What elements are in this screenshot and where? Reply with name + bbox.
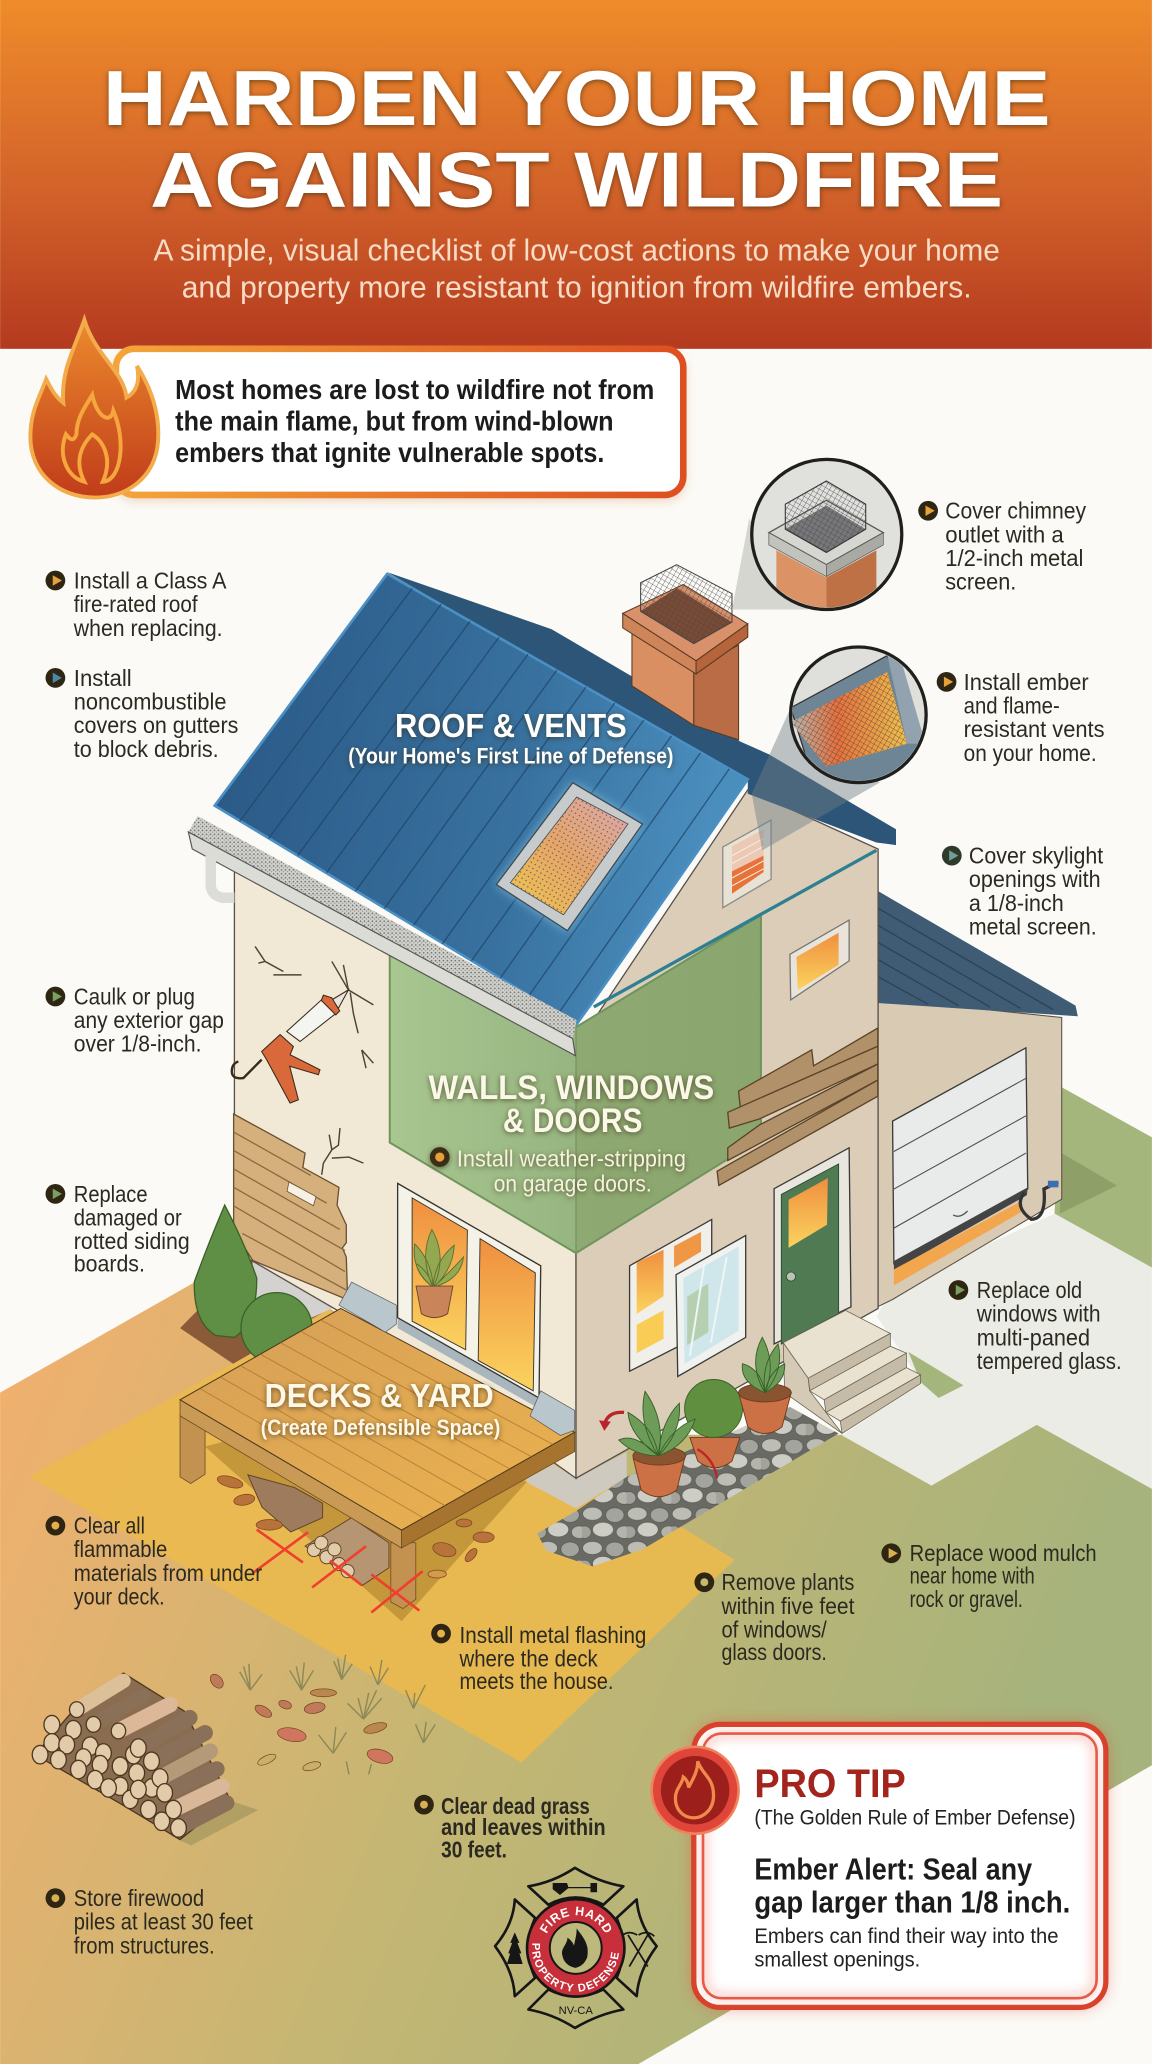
label: metal flashing: where the deck	[459, 1645, 598, 1671]
lawn patch by steps	[908, 1352, 964, 1398]
label: tempered glass: windows with	[976, 1301, 1101, 1327]
pro tip subheading: (The Golden Rule of Ember Defense)	[754, 1804, 1076, 1829]
label: remove plants: Remove plants	[721, 1569, 854, 1595]
label: remove plants: within five feet	[721, 1593, 855, 1619]
fascia	[188, 832, 575, 1056]
label: firewood	[46, 1885, 253, 1958]
lawn shadow	[1060, 1153, 1117, 1214]
label: dead grass: 30 feet.	[441, 1836, 507, 1862]
label: skylight: Cover skylight	[969, 843, 1104, 869]
caulk gun	[232, 990, 348, 1103]
label: tempered glass: Replace old	[977, 1277, 1082, 1303]
pro tip heading: PRO TIP	[754, 1762, 906, 1806]
right wall	[576, 790, 878, 1478]
hose	[1020, 1182, 1058, 1219]
label: firewood: piles at least 30 feet	[74, 1909, 253, 1935]
label: gutter covers: Install	[74, 665, 132, 691]
tree	[507, 1932, 523, 1964]
pro tip message: Ember Alert: Seal any	[754, 1854, 1032, 1887]
label: gutter covers: covers on gutters	[74, 712, 238, 738]
callout text: embers that ignite vulnerable spots.	[175, 437, 604, 468]
section heading: decks and yard	[261, 1377, 500, 1440]
firewood under deck	[248, 1475, 389, 1586]
ground: back lawn	[1054, 1087, 1152, 1268]
label: firewood: from structures.	[74, 1932, 215, 1958]
subtitle: A simple, visual checklist of low-cost actions to make your home	[153, 235, 1000, 268]
subtitle: and property more resistant to ignition from wildfire embers.	[182, 271, 972, 304]
section heading: roof and vents	[348, 707, 673, 768]
label: metal flashing: meets the house.	[460, 1668, 614, 1694]
shrubs	[194, 1205, 312, 1364]
label: dead grass: Clear dead grass	[441, 1793, 590, 1819]
chimney	[623, 565, 748, 740]
label: siding: damaged or	[74, 1204, 182, 1230]
deck top	[180, 1308, 575, 1530]
label: under deck: flammable	[74, 1536, 167, 1562]
dead grass and leaves	[208, 1655, 435, 1774]
icon: pro tip flame	[652, 1747, 739, 1834]
cross lobes	[495, 1868, 657, 2028]
label: gutter covers	[46, 665, 238, 762]
logo badge	[494, 1866, 658, 2030]
gable vent	[723, 820, 771, 908]
front door	[774, 1148, 851, 1344]
indoor plant	[414, 1229, 463, 1318]
pro tip message	[754, 1854, 1070, 1920]
label: mulch: Replace wood mulch	[910, 1540, 1097, 1566]
skylight	[496, 783, 642, 931]
label: tempered glass: multi-paned	[977, 1324, 1090, 1350]
shadow under deck	[205, 1395, 527, 1621]
seal text: PROPERTY DEFENSE	[532, 1944, 619, 1992]
garage	[874, 891, 1078, 1308]
ground: yard	[0, 1260, 1152, 2064]
sliding glass door	[398, 1183, 541, 1408]
label: mulch: near home with	[910, 1563, 1035, 1589]
label: siding	[46, 1181, 190, 1277]
section heading: walls windows doors	[429, 1069, 714, 1140]
weather strip	[894, 1202, 1021, 1285]
foundation	[527, 1448, 627, 1509]
gable trim	[594, 850, 876, 1007]
seal text	[532, 1906, 619, 1992]
icon: flame	[30, 320, 158, 498]
pot: spiky plant left	[619, 1391, 695, 1497]
label: caulk	[46, 983, 224, 1057]
label: class A roof: Install a Class A	[74, 567, 227, 593]
gutter guard	[188, 816, 577, 1039]
callout text: the main flame, but from wind-blown	[175, 405, 614, 436]
entry steps	[783, 1310, 921, 1433]
title: HARDEN YOUR HOME	[103, 56, 1051, 142]
label: class A roof: when replacing.	[73, 615, 223, 641]
wall cracks	[255, 946, 373, 1175]
soil behind shrubs	[180, 1257, 337, 1364]
label: remove plants	[694, 1569, 855, 1665]
label: weather-stripping: on garage doors.	[494, 1170, 652, 1196]
pro tip panel	[652, 1724, 1106, 2007]
seal flame	[562, 1928, 588, 1968]
upper window	[790, 920, 849, 1000]
left wall	[234, 869, 576, 1478]
label: tempered glass: tempered glass.	[977, 1348, 1122, 1374]
pro tip detail	[754, 1923, 1058, 1972]
label: mulch	[881, 1540, 1097, 1612]
callout text	[175, 374, 654, 468]
red arrow	[604, 1412, 624, 1424]
door seal	[894, 1187, 1028, 1270]
pro tip detail: Embers can find their way into the	[754, 1923, 1058, 1948]
label: metal flashing: Install metal flashing	[460, 1622, 646, 1648]
subtitle	[153, 235, 1000, 304]
label: dead grass	[414, 1793, 606, 1862]
label: class A roof	[46, 567, 227, 641]
label: caulk: over 1/8-inch.	[74, 1031, 202, 1057]
label: firewood: Store firewood	[74, 1885, 204, 1911]
label: skylight: metal screen.	[969, 914, 1097, 940]
house walls	[234, 790, 878, 1509]
label: ember vents: and flame-	[964, 692, 1060, 718]
left siding boards	[234, 1114, 348, 1300]
label: ember vents: Install ember	[964, 669, 1089, 695]
deck	[180, 1282, 575, 1609]
label: under deck: your deck.	[74, 1584, 165, 1610]
potted plants	[599, 1337, 791, 1497]
label: chimney: Cover chimney	[945, 498, 1087, 524]
driveway	[842, 1214, 1152, 1489]
label: skylight	[942, 843, 1104, 940]
open window sash	[676, 1236, 746, 1376]
deck fascia	[180, 1400, 402, 1548]
deck legs	[180, 1415, 205, 1484]
scattered deck leaves	[216, 1473, 494, 1578]
roof ridge strip	[387, 572, 896, 845]
region text: NV-CA	[559, 2005, 593, 2017]
section heading: decks and yard: (Create Defensible Space)	[261, 1415, 500, 1440]
label: under deck: materials from under	[74, 1560, 262, 1586]
section heading: roof and vents: (Your Home's First Line of Defense)	[348, 743, 673, 768]
zoom circle: ember vent	[791, 647, 926, 790]
label: gutter covers: to block debris.	[74, 736, 219, 762]
label: siding: rotted siding	[74, 1228, 190, 1254]
label: chimney: outlet with a	[945, 521, 1064, 547]
section heading: decks and yard: DECKS & YARD	[265, 1377, 494, 1414]
callout: ember warning	[30, 320, 685, 500]
red arrow into rocks	[697, 1449, 717, 1478]
label: skylight: openings with	[969, 866, 1101, 892]
firewood pile	[32, 1673, 258, 1845]
label: caulk: Caulk or plug	[74, 983, 195, 1009]
label: chimney: screen.	[945, 569, 1016, 595]
shovel	[553, 1884, 596, 1894]
label: metal flashing	[431, 1622, 646, 1694]
seal	[527, 1899, 624, 1997]
label: siding: boards.	[74, 1251, 145, 1277]
label: dead grass: and leaves within	[441, 1814, 606, 1840]
label: ember vents: on your home.	[964, 740, 1097, 766]
label: weather-stripping	[430, 1145, 686, 1196]
green wall zone	[390, 915, 761, 1253]
label: skylight: a 1/8-inch	[969, 890, 1064, 916]
callout text: Most homes are lost to wildfire not from	[175, 374, 654, 405]
label: chimney: 1/2-inch metal	[945, 545, 1083, 571]
label: gutter covers: noncombustible	[74, 688, 227, 714]
label: chimney	[918, 498, 1087, 595]
front windows	[630, 1219, 746, 1376]
label: remove plants: of windows/	[721, 1617, 827, 1643]
garage door	[893, 1048, 1028, 1264]
label: ember vents: resistant vents	[964, 716, 1105, 742]
label: class A roof: fire-rated roof	[74, 591, 198, 617]
standing seams	[240, 588, 729, 1014]
title	[103, 56, 1051, 224]
rock border	[537, 1407, 839, 1566]
defensible zone	[29, 1310, 735, 1763]
callout cone: chimney	[732, 519, 808, 609]
title: AGAINST WILDFIRE	[150, 138, 1003, 224]
label: weather-stripping: Install weather-stripping	[457, 1145, 686, 1171]
pro tip detail: smallest openings.	[754, 1947, 920, 1972]
roof main plane	[215, 574, 748, 1024]
right siding boards	[717, 1028, 878, 1185]
garage roof	[878, 891, 1078, 1016]
downspout	[211, 856, 234, 898]
label: under deck	[46, 1513, 262, 1610]
axes	[621, 1933, 654, 1967]
pot: spiky plant right	[739, 1337, 791, 1433]
label: remove plants: glass doors.	[721, 1639, 827, 1665]
label: tempered glass	[949, 1277, 1122, 1374]
label: siding: Replace	[74, 1181, 148, 1207]
label: mulch: rock or gravel.	[910, 1586, 1023, 1612]
zoom circle: chimney screen	[752, 459, 902, 632]
red x marks	[253, 1530, 423, 1612]
spark arrester screen	[641, 565, 732, 644]
label: caulk: any exterior gap	[74, 1007, 224, 1033]
label: ember vents	[937, 669, 1105, 766]
section heading: roof and vents: ROOF & VENTS	[395, 707, 627, 744]
label: under deck: Clear all	[74, 1513, 145, 1539]
roof	[188, 572, 896, 1056]
metal flashing	[339, 1282, 396, 1332]
section heading: walls windows doors: WALLS, WINDOWS	[429, 1069, 714, 1107]
pot: round bush	[685, 1380, 743, 1468]
pro tip message: gap larger than 1/8 inch.	[754, 1887, 1070, 1920]
callout cone: vent	[752, 708, 879, 850]
seal text: FIRE HARD	[540, 1906, 612, 1934]
section heading: walls windows doors: & DOORS	[503, 1102, 642, 1140]
header banner	[0, 0, 1152, 349]
